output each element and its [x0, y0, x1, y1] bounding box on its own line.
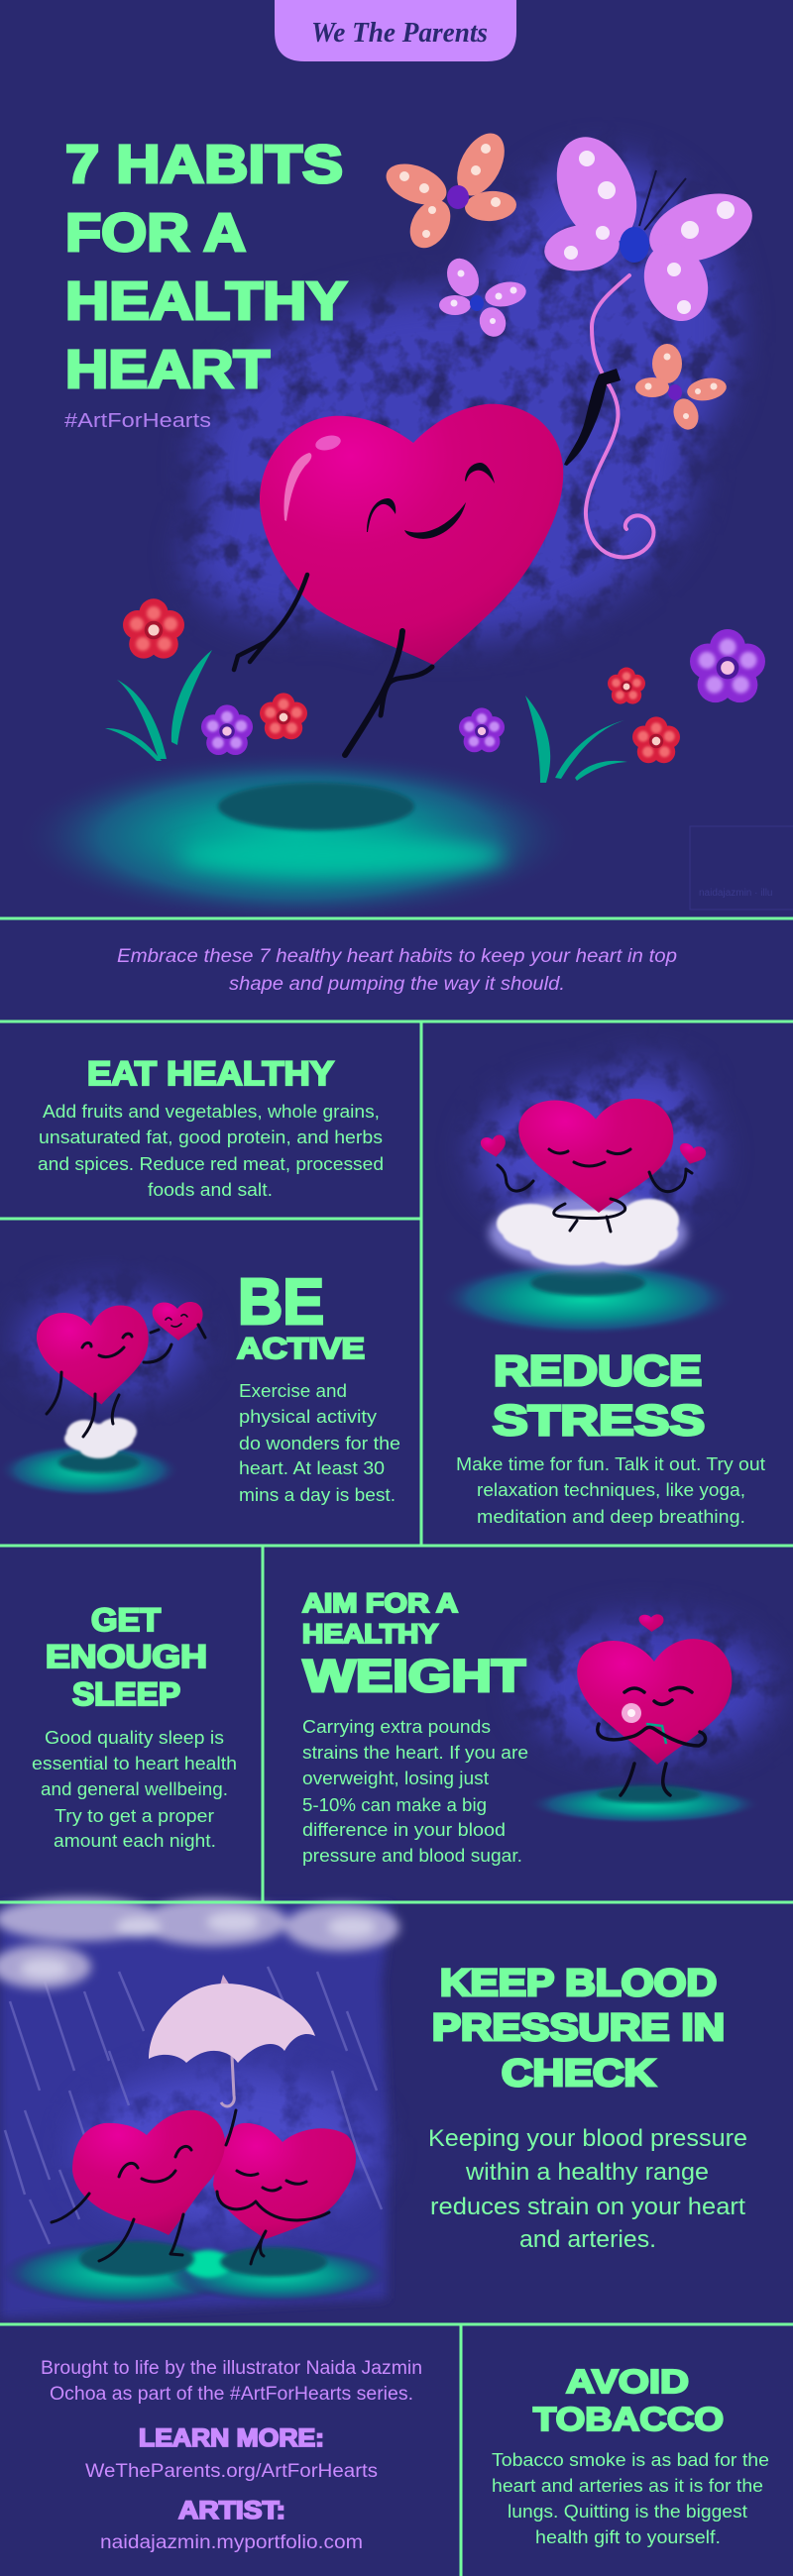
- heading: REDUCE: [494, 1347, 702, 1395]
- small heart: [153, 1302, 203, 1341]
- shadows: [79, 2241, 327, 2277]
- cloud: [64, 1418, 137, 1458]
- heading: STRESS: [493, 1397, 705, 1445]
- heart body: [260, 404, 563, 665]
- textured backdrop: [525, 1620, 773, 1759]
- body text: do wonders for the: [239, 1434, 400, 1453]
- panel: avoid tobacco: [492, 2363, 769, 2547]
- body text: [428, 2125, 747, 2253]
- artist heading: ARTIST:: [178, 2497, 285, 2524]
- body text: difference in your blood: [302, 1820, 506, 1840]
- heart shadow: [218, 783, 414, 830]
- body text: heart and arteries as it is for the: [492, 2476, 763, 2496]
- cloud: [497, 1199, 679, 1265]
- body text: Try to get a proper: [55, 1806, 214, 1826]
- hero textured blue backdrop: [188, 159, 734, 639]
- learn more heading: LEARN MORE:: [139, 2424, 324, 2452]
- body text: relaxation techniques, like yoga,: [477, 1480, 745, 1500]
- body text: [239, 1381, 400, 1505]
- body text: pressure and blood sugar.: [302, 1846, 522, 1866]
- textured backdrop: [476, 1065, 714, 1229]
- rain streaks: [5, 1967, 382, 2244]
- learn more link: WeTheParents.org/ArtForHearts: [85, 2461, 378, 2482]
- face and limbs: [598, 1687, 706, 1795]
- credit text: Brought to life by the illustrator Naida Jazmin: [41, 2358, 422, 2379]
- heading: AVOID: [566, 2363, 689, 2400]
- body text: [38, 1102, 384, 1200]
- ground glow: [15, 750, 580, 924]
- clouds: [0, 1897, 399, 1988]
- heading: EAT HEALTHY: [87, 1055, 334, 1093]
- heading: CHECK: [502, 2053, 656, 2094]
- cloud glow: [489, 1196, 687, 1271]
- body text: essential to heart health: [32, 1754, 237, 1773]
- heading: WEIGHT: [303, 1651, 525, 1701]
- panel: healthy weight: [302, 1588, 773, 1866]
- body text: Add fruits and vegetables, whole grains,: [43, 1102, 380, 1122]
- artist watermark: [690, 826, 793, 910]
- logo tab: We The Parents: [311, 17, 488, 49]
- textured backdrop: [79, 2071, 377, 2229]
- heading: [493, 1347, 705, 1445]
- intro text: [117, 946, 677, 995]
- logo tab: [275, 0, 516, 61]
- body text: amount each night.: [54, 1831, 216, 1851]
- credit text: [41, 2358, 422, 2405]
- body text: Exercise and: [239, 1381, 347, 1401]
- heading: [533, 2363, 724, 2437]
- body text: Tobacco smoke is as bad for the: [492, 2450, 769, 2470]
- textured backdrop: [20, 1288, 198, 1397]
- panel: be active: [0, 1265, 400, 1505]
- body text: and arteries.: [519, 2226, 656, 2253]
- faces and limbs: [47, 1315, 205, 1437]
- heading: PRESSURE IN: [432, 2007, 725, 2049]
- body text: overweight, losing just: [302, 1769, 489, 1788]
- body text: 5-10% can make a big: [302, 1795, 487, 1815]
- body text: reduces strain on your heart: [430, 2194, 745, 2220]
- title: 7 HABITS: [65, 135, 343, 194]
- body text: mins a day is best.: [239, 1485, 396, 1505]
- body text: health gift to yourself.: [535, 2527, 721, 2547]
- heading: GET: [91, 1602, 161, 1638]
- body text: and general wellbeing.: [41, 1779, 228, 1799]
- legs: [345, 631, 402, 755]
- illustration: two hearts on cloud: [0, 1288, 205, 1497]
- butterfly: salmon: [381, 126, 517, 256]
- heading: HEALTHY: [302, 1619, 438, 1649]
- body text: foods and salt.: [148, 1180, 273, 1200]
- heading: SLEEP: [72, 1676, 180, 1712]
- illustration: meditating heart on cloud: [438, 1065, 736, 1336]
- heading: ACTIVE: [237, 1333, 365, 1365]
- panel: eat healthy: [38, 1055, 384, 1200]
- right arm and hand: [564, 369, 621, 466]
- heading: [302, 1588, 525, 1701]
- body text: and spices. Reduce red meat, processed: [38, 1154, 384, 1174]
- heart highlights: [283, 453, 311, 521]
- body text: within a healthy range: [465, 2159, 709, 2186]
- heading: [432, 1963, 725, 2094]
- face and limbs: [498, 1149, 692, 1232]
- heart face: [367, 463, 495, 539]
- body text: [492, 2450, 769, 2547]
- balloon string: [586, 275, 654, 557]
- hashtag: #ArtForHearts: [64, 410, 211, 432]
- heading: BE: [238, 1265, 324, 1338]
- intro text: shape and pumping the way it should.: [229, 974, 565, 995]
- body text: [32, 1728, 237, 1851]
- flowers and leaves right: [459, 629, 765, 783]
- heart top glint: [314, 433, 342, 453]
- body text: Carrying extra pounds: [302, 1717, 491, 1737]
- body text: lungs. Quitting is the biggest: [508, 2502, 747, 2522]
- heading: KEEP BLOOD: [440, 1963, 717, 2004]
- artist link: naidajazmin.myportfolio.com: [100, 2532, 363, 2553]
- credit text: Ochoa as part of the #ArtForHearts series.: [50, 2384, 413, 2405]
- body text: physical activity: [239, 1407, 377, 1427]
- body text: unsaturated fat, good protein, and herbs: [39, 1127, 383, 1147]
- panel: reduce stress: [438, 1065, 765, 1527]
- heart: [518, 1099, 673, 1213]
- right heart: [213, 2123, 356, 2239]
- heading: ENOUGH: [46, 1639, 207, 1674]
- heart: [577, 1639, 732, 1765]
- illustration: heart holding flower: [525, 1614, 773, 1824]
- body text: Good quality sleep is: [45, 1728, 224, 1748]
- main heart character: [234, 369, 621, 755]
- ground glow: [527, 1784, 761, 1824]
- title: [65, 135, 347, 399]
- left heart: [72, 2110, 225, 2235]
- heart shadow: [598, 1785, 701, 1803]
- flower: [622, 1703, 666, 1744]
- left arm: [234, 575, 307, 670]
- panel: hero illustration: [15, 125, 793, 924]
- heading: [46, 1602, 207, 1712]
- title: HEART: [65, 340, 270, 399]
- ground glow: [438, 1260, 736, 1336]
- artist watermark: naidajazmin · illu: [699, 888, 772, 899]
- small heart: [639, 1614, 664, 1632]
- body text: meditation and deep breathing.: [477, 1507, 745, 1527]
- rain backdrop: [0, 1904, 392, 2318]
- heading: [237, 1265, 365, 1365]
- cloud shadow: [530, 1270, 645, 1296]
- umbrella: [149, 1975, 315, 2106]
- body text: [456, 1454, 765, 1527]
- title: FOR A: [65, 203, 246, 263]
- panel: credits: [41, 2358, 422, 2553]
- intro text: Embrace these 7 healthy heart habits to keep your heart in top: [117, 946, 677, 967]
- butterfly: small pink: [439, 254, 528, 341]
- panel: get enough sleep: [32, 1602, 237, 1851]
- panel: blood pressure: [0, 1897, 747, 2318]
- faces and limbs: [52, 2110, 329, 2264]
- body text: strains the heart. If you are: [302, 1743, 528, 1763]
- body text: Make time for fun. Talk it out. Try out: [456, 1454, 765, 1474]
- cloud shadow: [58, 1451, 140, 1473]
- ground glow: [0, 2240, 389, 2306]
- illustration: two hearts under umbrella in rain: [0, 1897, 399, 2318]
- heading: TOBACCO: [533, 2401, 724, 2437]
- flowers and leaves left: [105, 598, 307, 761]
- body text: [302, 1717, 528, 1866]
- big heart: [34, 1303, 155, 1411]
- heading: AIM FOR A: [302, 1588, 458, 1618]
- title: HEALTHY: [65, 271, 347, 331]
- body text: Keeping your blood pressure: [428, 2125, 747, 2152]
- small hearts: [480, 1134, 508, 1159]
- butterfly: large pink: [541, 125, 761, 330]
- ground glow: [0, 1444, 180, 1497]
- body text: heart. At least 30: [239, 1458, 385, 1478]
- butterfly: small salmon: [635, 344, 729, 433]
